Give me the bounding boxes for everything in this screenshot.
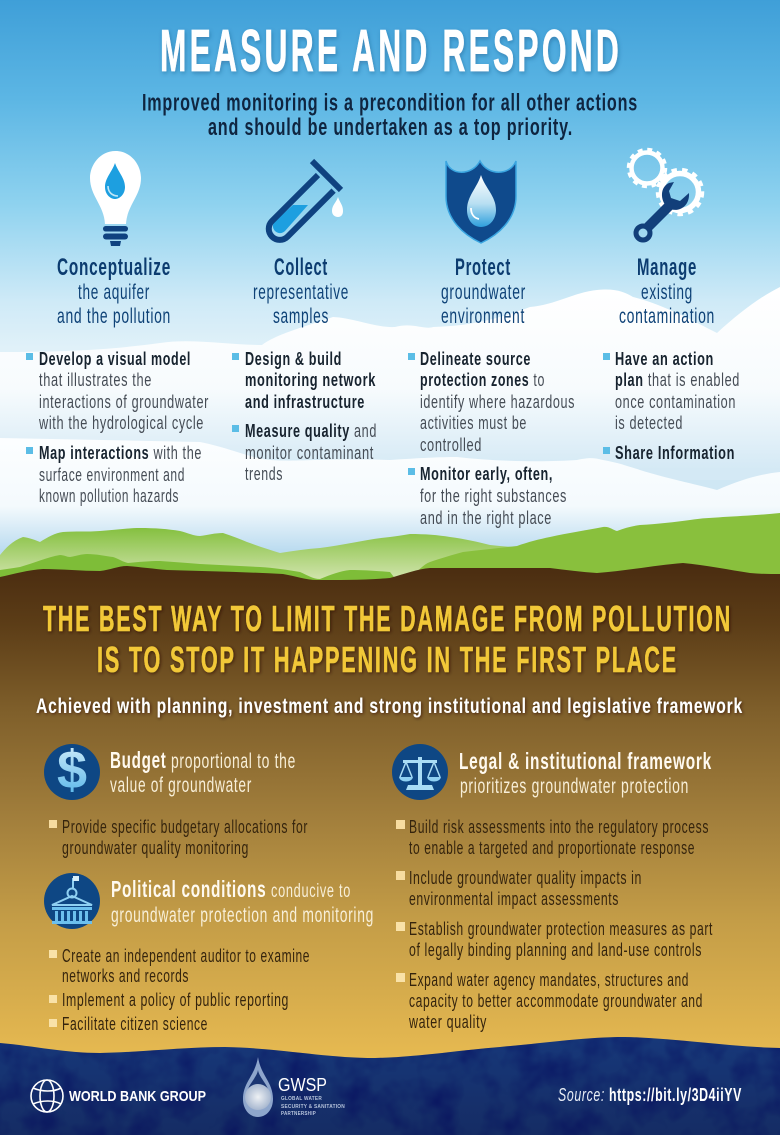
bullets: collect: monitoring network: [245, 370, 376, 390]
bullets: collect: and infrastructure: [245, 392, 365, 412]
column headings: manage: existing: [641, 281, 693, 304]
bullets: manage: [603, 349, 740, 463]
icon: dollar: $: [57, 740, 87, 800]
icon: parliament building: [44, 873, 100, 929]
bullets: protect: Monitor early, often,: [420, 464, 553, 484]
bullets: conceptualize: surface environment and: [39, 465, 185, 485]
bullets: collect: Design & build: [245, 349, 342, 369]
bullets: legal framework: [396, 817, 713, 1032]
bullets: legal framework: environmental impact assessments: [409, 889, 619, 909]
logo: gwsp: GLOBAL WATER: [281, 1096, 322, 1102]
bullets: manage: Share Information: [615, 443, 735, 463]
bullets: political conditions: networks and records: [62, 966, 189, 986]
heading: political conditions: Political conditions conducive to: [111, 876, 351, 902]
bullets: manage: is detected: [615, 413, 683, 433]
column headings: collect: Collect: [274, 254, 328, 281]
bullets: collect: [232, 349, 377, 484]
bullets: political conditions: Create an independent auditor to examine: [62, 946, 310, 966]
logo: gwsp: SECURITY & SANITATION: [281, 1104, 345, 1110]
bullets: protect: controlled: [420, 435, 482, 455]
column headings: protect: [441, 254, 526, 328]
subtitle: and should be undertaken as a top priority.: [208, 114, 573, 141]
bullets: budget: [49, 817, 308, 858]
bullets: protect: and in the right place: [420, 508, 552, 528]
column headings: manage: contamination: [619, 305, 715, 328]
logo: gwsp: GWSP: [278, 1075, 327, 1095]
bullets: collect: trends: [245, 464, 283, 484]
subtitle: [142, 90, 638, 141]
column headings: protect: environment: [441, 305, 525, 328]
bullets: protect: Delineate source: [420, 349, 531, 369]
bullets: protect: activities must be: [420, 413, 527, 433]
water footer band: [0, 1037, 780, 1135]
bullets: conceptualize: Develop a visual model: [39, 349, 191, 369]
bullets: conceptualize: with the hydrological cycle: [38, 413, 204, 433]
bullets: budget: Provide specific budgetary allocations for: [62, 817, 308, 837]
bullets: protect: protection zones to: [420, 370, 545, 390]
column headings: protect: groundwater: [441, 281, 526, 304]
bullets: conceptualize: [26, 349, 209, 506]
icon: shield with drop: [446, 161, 516, 243]
logo: gwsp: [243, 1057, 345, 1117]
bullets: manage: plan that is enabled: [615, 370, 740, 390]
bullets: legal framework: water quality: [408, 1012, 487, 1032]
bullets: political conditions: [49, 946, 310, 1034]
bullets: collect: monitor contaminant: [245, 443, 374, 463]
icon: scales: [392, 744, 448, 800]
bullets: legal framework: Include groundwater quality impacts in: [409, 868, 642, 888]
column headings: conceptualize: and the pollution: [57, 305, 171, 328]
bullets: political conditions: Facilitate citizen science: [62, 1014, 208, 1034]
icon: dollar: [44, 740, 100, 800]
heading: legal and institutional framework: [459, 748, 712, 798]
heading: budget: value of groundwater: [110, 774, 252, 797]
column headings: collect: representative: [253, 281, 349, 304]
column headings: protect: Protect: [455, 254, 511, 281]
column headings: conceptualize: [57, 254, 171, 328]
bullets: protect: identify where hazardous: [420, 392, 575, 412]
bullets: conceptualize: interactions of groundwater: [39, 392, 209, 412]
logo: world bank group: [31, 1080, 206, 1112]
heading: budget: Budget proportional to the: [110, 747, 296, 773]
heading: budget: [110, 747, 296, 797]
column headings: conceptualize: the aquifer: [78, 281, 150, 304]
column headings: conceptualize: Conceptualize: [57, 254, 171, 281]
hills: [0, 513, 780, 585]
column headings: collect: samples: [273, 305, 329, 328]
bullets: political conditions: Implement a policy of public reporting: [62, 990, 289, 1010]
icon: gears and wrench: [628, 150, 702, 240]
bullets: manage: Have an action: [615, 349, 714, 369]
bullets: conceptualize: that illustrates the: [39, 370, 152, 390]
bullets: conceptualize: known pollution hazards: [39, 486, 179, 506]
icon: light bulb with water drop: [90, 151, 141, 246]
clouds: [0, 287, 780, 560]
heading: political conditions: groundwater protection and monitoring: [111, 904, 374, 927]
soil layer: [0, 563, 780, 1060]
logo: gwsp: PARTNERSHIP: [281, 1111, 316, 1117]
bullets: conceptualize: Map interactions with the: [39, 443, 202, 463]
bullets: protect: for the right substances: [420, 486, 567, 506]
heading: political conditions: [111, 876, 374, 927]
logo: world bank group: WORLD BANK GROUP: [69, 1088, 206, 1105]
column headings: manage: [619, 254, 715, 328]
column headings: collect: [253, 254, 349, 328]
bullets: collect: Measure quality and: [245, 421, 377, 441]
icon: test tube: [269, 161, 343, 240]
bullets: budget: groundwater quality monitoring: [62, 838, 249, 858]
banner heading: [43, 598, 732, 680]
column headings: manage: Manage: [637, 254, 697, 281]
bullets: protect: [408, 349, 575, 528]
sky background: [0, 0, 780, 580]
